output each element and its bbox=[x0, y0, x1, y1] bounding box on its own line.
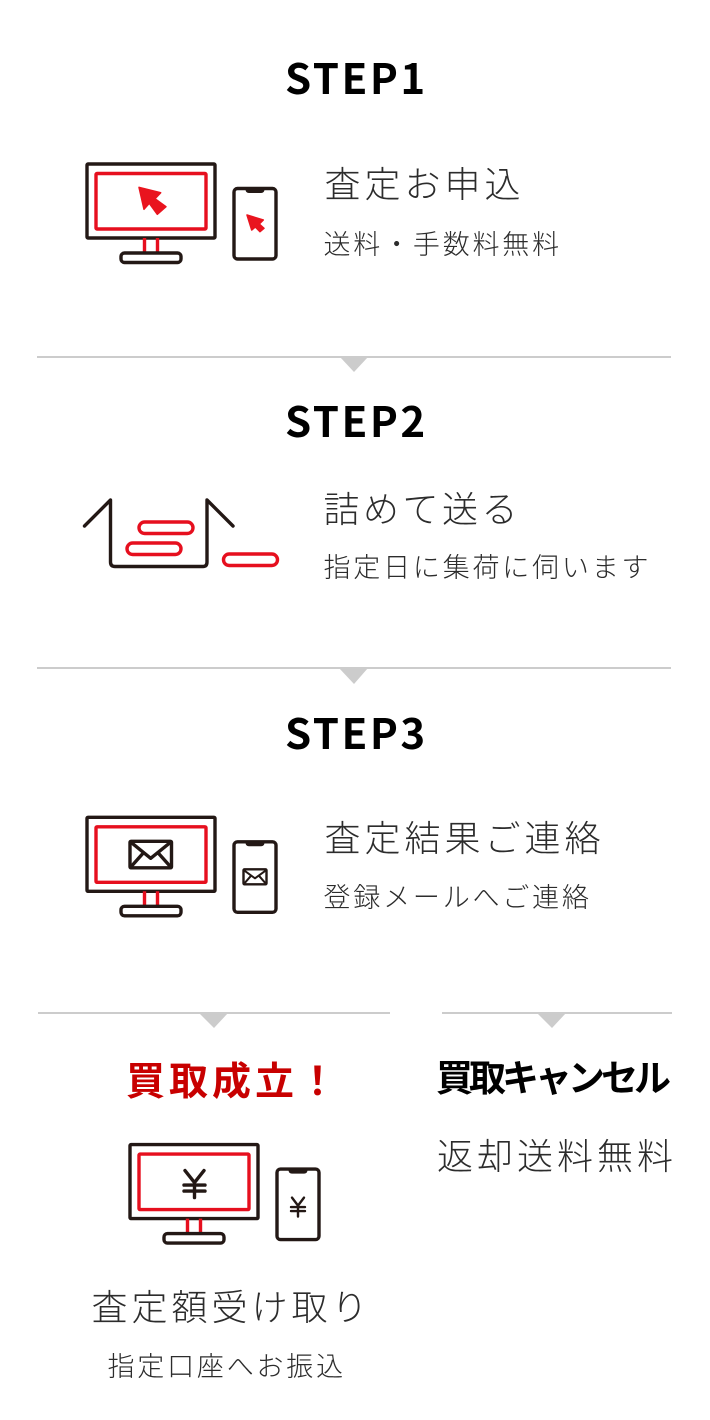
step 3 description: 登録メールへご連絡 bbox=[324, 876, 592, 915]
step 2 heading: STEP2 bbox=[285, 389, 428, 450]
divider: step 2 to 3 bbox=[37, 667, 671, 684]
step 1 description: 送料・手数料無料 bbox=[324, 223, 562, 262]
step 1 heading: STEP1 bbox=[285, 46, 428, 107]
cancel description: 返却送料無料 bbox=[437, 1128, 677, 1180]
step 3 title: 査定結果ご連絡 bbox=[324, 810, 605, 862]
purchase accepted heading: 買取成立！ bbox=[126, 1051, 341, 1107]
step 3 heading: STEP3 bbox=[285, 701, 428, 762]
icon: monitor and phone with cursor bbox=[85, 162, 278, 264]
icon: monitor and phone with yen sign bbox=[128, 1142, 321, 1245]
step 2 description: 指定日に集荷に伺います bbox=[324, 546, 651, 585]
accepted description: 指定口座へお振込 bbox=[108, 1345, 346, 1384]
divider: step 3 to cancel bbox=[442, 1012, 672, 1028]
purchase cancel heading: 買取キャンセル bbox=[436, 1048, 667, 1102]
divider: step 3 to accepted bbox=[38, 1012, 390, 1028]
accepted title: 査定額受け取り bbox=[92, 1279, 372, 1331]
step 2 title: 詰めて送る bbox=[324, 481, 521, 533]
step 1 title: 査定お申込 bbox=[324, 156, 525, 208]
divider: step 1 to 2 bbox=[37, 356, 671, 372]
icon: open box with packages bbox=[82, 498, 280, 568]
icon: monitor and phone with envelope bbox=[85, 816, 278, 918]
